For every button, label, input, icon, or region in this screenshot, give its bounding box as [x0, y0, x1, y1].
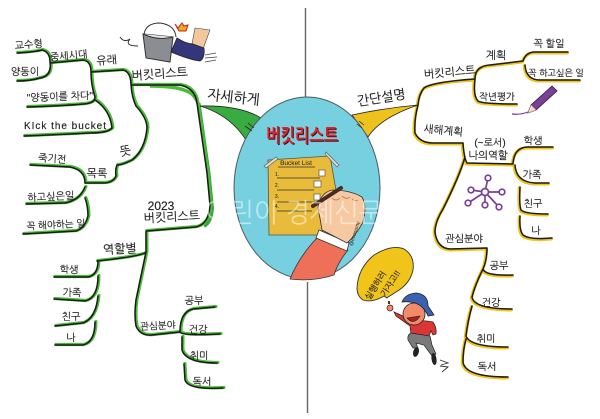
labels: left side: 친구	[62, 311, 81, 323]
bucket list paper: 4.	[275, 204, 279, 210]
icon: purple network	[465, 175, 505, 210]
labels: left side: 2023	[148, 199, 175, 213]
labels: right side: 건강	[482, 297, 501, 309]
bucket list paper: Bucket List	[280, 160, 312, 167]
labels: left side: 꼭 해야하는 일	[26, 218, 86, 233]
labels: right side: 버킷리스트	[423, 64, 477, 81]
labels: right side: 취미	[477, 333, 495, 345]
wedge ticks	[245, 121, 364, 131]
labels: right side: 가족	[523, 169, 542, 181]
labels: left side: 하고싶은일	[27, 190, 75, 204]
labels: left side: 유래	[96, 53, 118, 68]
labels: right side: 새해계획	[423, 123, 463, 139]
central oval	[234, 97, 380, 279]
labels: right side: 친구	[524, 198, 543, 210]
right yellow branches	[414, 52, 580, 378]
labels: left side: 학생	[60, 264, 78, 276]
speech bubble: 가자고!!	[379, 269, 402, 298]
labels: left side: 공부	[185, 295, 204, 307]
labels: right side: 나의역할	[468, 150, 508, 162]
labels: left side: "양동이를 차다"	[27, 90, 94, 104]
labels: left side: 건강	[189, 324, 208, 336]
divider line	[306, 8, 308, 413]
central title: 버킷리스트	[266, 126, 338, 147]
labels: left side: 관심분야	[140, 319, 176, 333]
labels: right side: 꼭 할일	[534, 38, 564, 50]
labels: left side: 목록	[87, 168, 108, 180]
labels: left side: 교수형	[14, 38, 43, 52]
character: running kid	[387, 293, 448, 372]
labels: left side: 역할별	[103, 241, 137, 257]
labels: right side: 관심분야	[445, 233, 483, 245]
hand and arm writing	[290, 188, 365, 280]
speech bubble	[357, 247, 413, 302]
left green connector wedge	[200, 106, 261, 140]
bucket list paper: 3.	[275, 194, 279, 200]
central title: 버킷리스트	[267, 127, 339, 148]
labels: left side: 취미	[190, 350, 208, 362]
labels: left side: KIck the bucket	[24, 121, 106, 132]
watermark: 어린이 경제신문	[205, 198, 383, 228]
labels: right side: 학생	[524, 135, 542, 147]
hand and arm writing: @economy	[348, 220, 362, 247]
labels: right side	[356, 38, 584, 373]
bucket list paper	[264, 152, 339, 235]
left green branches	[17, 50, 224, 388]
labels: left side	[11, 38, 261, 388]
labels: left side: 중세시대	[49, 48, 88, 64]
labels: right side: 계획	[486, 49, 506, 62]
bucket list paper: 1.	[275, 172, 279, 178]
labels: left side: 가족	[63, 287, 82, 299]
labels: right side: 꼭 하고싶은 일	[528, 68, 584, 78]
labels: right side: (~로서)	[474, 137, 506, 149]
labels: left side: 뜻	[119, 143, 132, 159]
labels: right side: 간단설명	[356, 86, 407, 109]
right yellow connector wedge	[352, 105, 418, 137]
icon: purple pencil	[512, 86, 557, 114]
labels: left side: 죽기전	[38, 152, 67, 166]
bucket list paper: 2.	[275, 183, 279, 189]
speech bubble: 실행하러	[363, 269, 388, 302]
labels: right side: 작년평가	[479, 91, 515, 103]
labels: left side: 버킷리스트	[143, 209, 200, 225]
labels: left side: 독서	[193, 376, 211, 388]
labels: right side: 독서	[478, 361, 496, 373]
labels: left side: 나	[66, 332, 76, 344]
labels: left side: 버킷리스트	[131, 65, 188, 83]
labels: right side: 공부	[490, 260, 509, 272]
labels: left side: 양동이	[11, 66, 39, 78]
thick green main branch	[150, 86, 212, 226]
icon: kicked bucket	[120, 23, 217, 62]
labels: left side: 자세하게	[207, 86, 261, 108]
labels: right side: 나	[531, 225, 541, 237]
